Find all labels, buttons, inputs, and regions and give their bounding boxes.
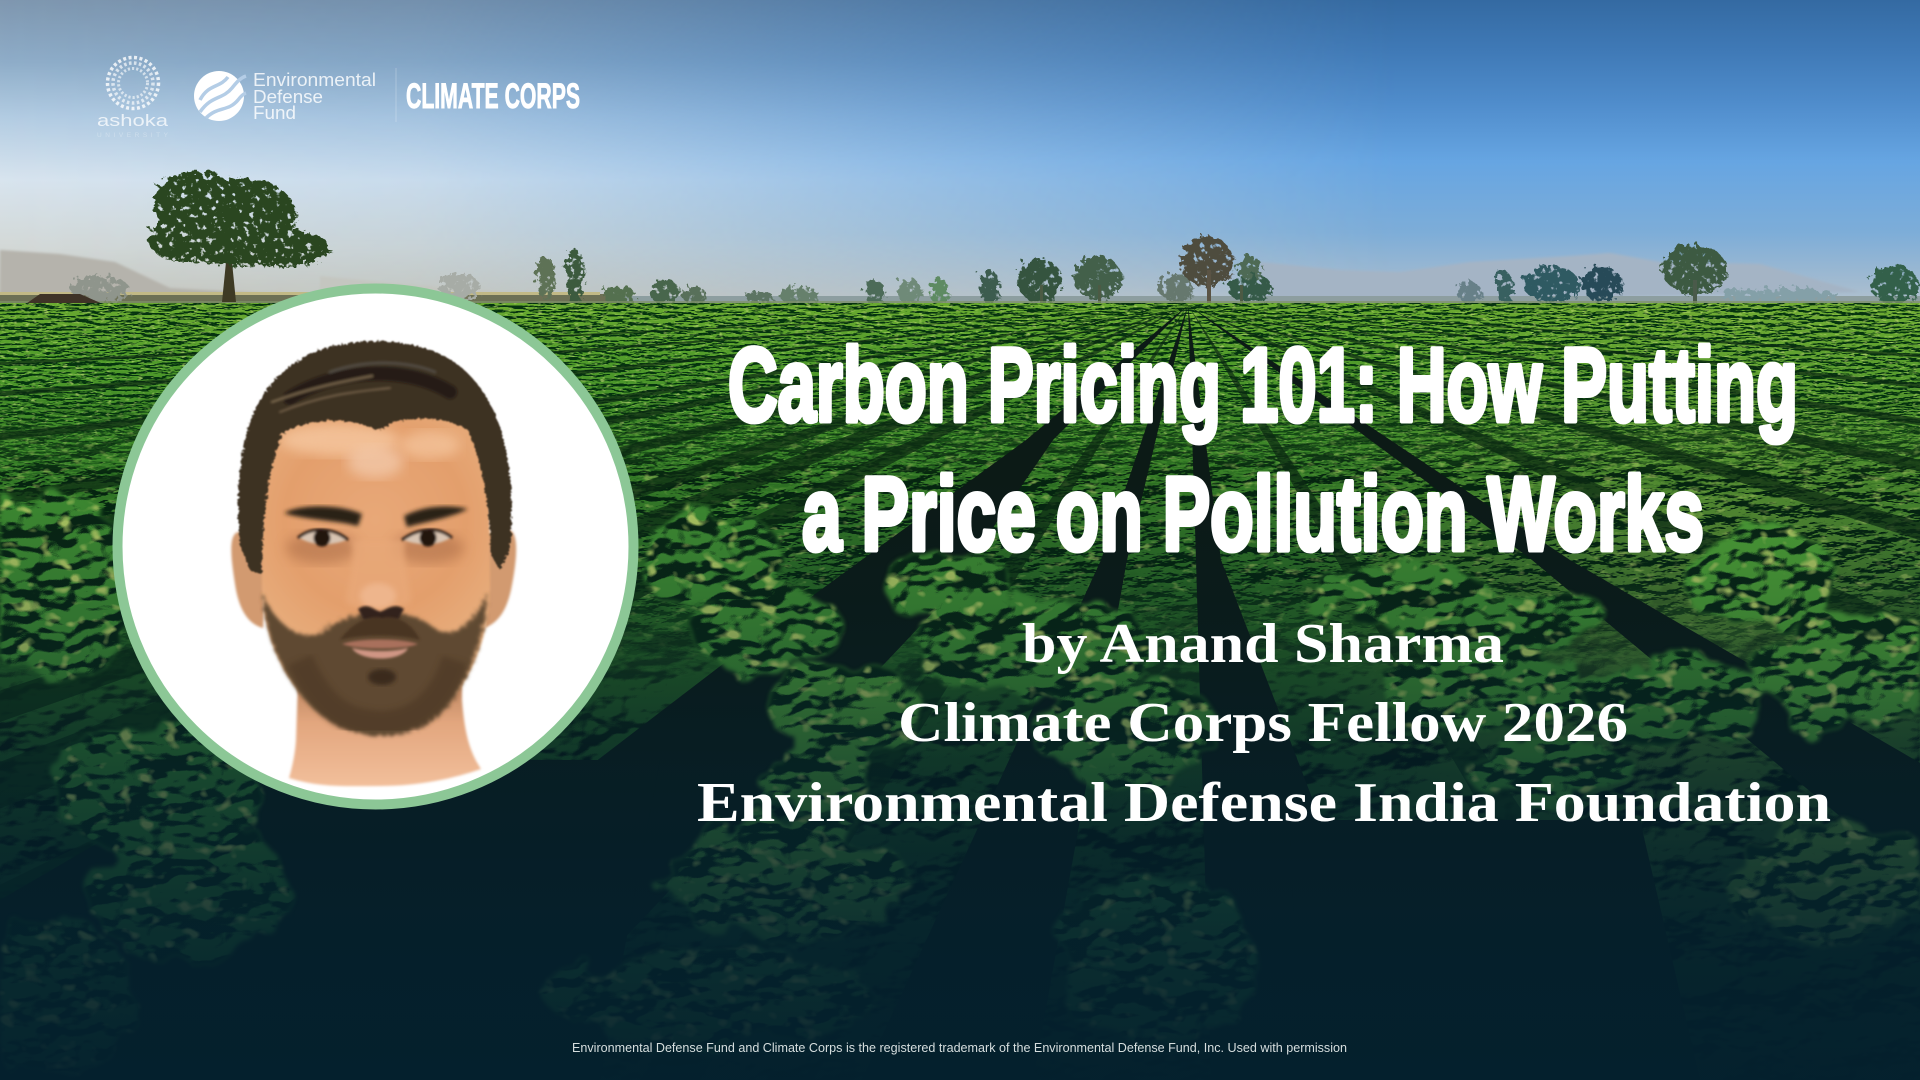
eyebrows	[284, 506, 468, 527]
footer trademark note: Environmental Defense Fund and Climate Corps is the registered trademark of the Environmental Defense Fund, Inc. Used with permission	[572, 1040, 1347, 1055]
treeline on the horizon	[0, 237, 1920, 306]
logo: Environmental Defense Fund	[194, 70, 376, 123]
ears	[231, 530, 516, 628]
logo: Environmental Defense Fund: Defense	[253, 87, 323, 107]
logo: Ashoka University: ashoka	[97, 111, 169, 130]
lettuce rows	[0, 490, 1920, 1075]
logo: Climate Corps: CLIMATE CORPS	[406, 77, 580, 116]
portrait ring	[118, 288, 634, 804]
eye socket shading	[286, 532, 464, 564]
distant mountains	[0, 250, 1860, 303]
neck	[289, 680, 481, 786]
author details: by Anand Sharma	[1022, 613, 1504, 675]
main soil furrows	[0, 305, 1920, 1080]
thin row shadow lines	[0, 305, 1920, 1080]
mouth	[342, 640, 418, 658]
sky	[0, 0, 1920, 310]
logo: Ashoka University: UNIVERSITY	[97, 132, 169, 139]
author details: Environmental Defense India Foundation	[697, 772, 1831, 834]
nose	[351, 540, 407, 620]
dark gradient overlay	[0, 470, 1920, 1080]
large tree on the left	[20, 172, 330, 308]
field base and soil furrows	[0, 303, 1920, 906]
eyes	[298, 530, 452, 546]
portrait face	[231, 341, 516, 786]
logo: Environmental Defense Fund: Fund	[253, 103, 296, 123]
title	[728, 327, 1798, 573]
hair	[238, 341, 512, 575]
logo: Ashoka University	[97, 58, 169, 139]
author details	[697, 613, 1831, 834]
logo divider	[396, 68, 397, 122]
portrait in circular frame	[118, 288, 634, 804]
skin	[262, 416, 491, 693]
author details: Climate Corps Fellow 2026	[898, 692, 1628, 754]
logos row	[97, 58, 580, 139]
moustache and soul patch	[340, 617, 420, 640]
beard	[262, 592, 488, 736]
logo: Environmental Defense Fund: Environmental	[253, 70, 376, 90]
